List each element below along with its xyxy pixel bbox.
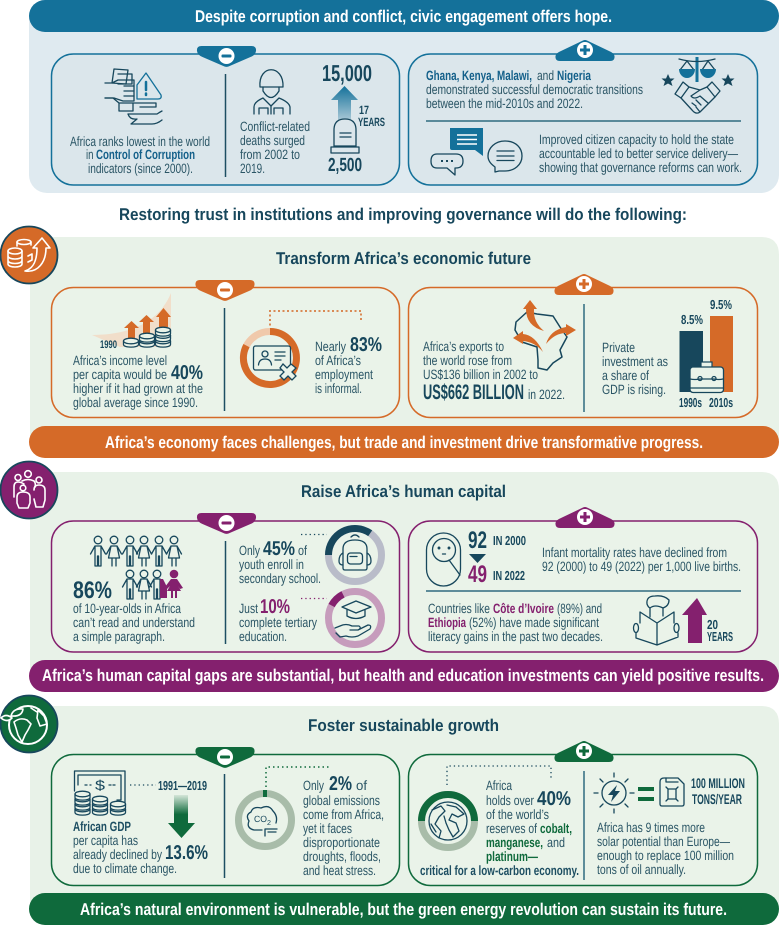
text: emissions: come from Africa,: [303, 807, 384, 822]
text: secondary school 45%: youth enroll in: [239, 557, 304, 572]
minus tab: [195, 747, 255, 768]
stat: deaths 2,500 to 15,000: 17: [359, 103, 369, 117]
stat: GDP decline arrow: 1991—2019: [158, 778, 207, 793]
text: minerals 40%: [420, 778, 579, 878]
icon: coins and rising arrow: [0, 226, 58, 284]
text: GDP decline: due to climate change.: [73, 861, 177, 876]
text: private investment: GDP is rising.: [602, 382, 666, 397]
text: conflict deaths: 2019.: [240, 161, 265, 176]
text: control of corruption: [70, 134, 210, 176]
text: exports: in 2022.: [528, 387, 565, 402]
text: tertiary education 10%: education.: [239, 629, 287, 644]
text: control of corruption: indicators (since 2000).: [88, 161, 193, 176]
icon: sun equals fuel: 100 MILLION: [691, 775, 745, 791]
title: Foster sustainable growth: [308, 716, 499, 735]
text: 83% informal: is informal.: [315, 381, 362, 396]
text: minerals 40%: holds over: [486, 793, 534, 808]
text: private investment: [602, 340, 668, 397]
text: emissions: global emissions: [303, 793, 380, 808]
minus tab: [197, 513, 256, 534]
icon: CO2 cloud: [247, 807, 277, 836]
text: GDP decline: African GDP: [73, 819, 131, 834]
text: democratic transitions: between the mid-2010s and 2022.: [426, 96, 583, 111]
section background: [30, 237, 779, 440]
text: minerals 40%: reserves of: [486, 821, 537, 836]
icon: briefcase: [690, 362, 724, 392]
plus tab: [554, 274, 614, 295]
stat: deaths 2,500 to 15,000: [322, 60, 385, 176]
text: secondary school 45%: [239, 538, 321, 586]
text: minerals 40%: manganese,: [486, 835, 543, 850]
text: conflict deaths: [240, 119, 310, 176]
text: secondary school 45%: secondary school.: [239, 571, 321, 586]
text: tertiary education 10%: complete tertiary: [239, 615, 317, 630]
icon: sun equals fuel: [594, 773, 745, 813]
text: 86% cannot read: [73, 577, 195, 644]
card: economic challenges: [52, 280, 400, 418]
text: solar potential: Africa has 9 times more: [597, 820, 705, 835]
text: emissions: disproportionate: [303, 835, 380, 850]
text: conflict deaths: from 2002 to: [240, 147, 300, 162]
text: citizen capacity: [539, 132, 742, 175]
text: solar potential: tons of oil annually.: [597, 862, 686, 877]
icon: income growth coins: 1990: [100, 339, 117, 351]
section: sustainable growth: [0, 696, 779, 925]
text: tertiary education 10%: Just: [239, 601, 258, 616]
text: tertiary education 10%: [239, 596, 317, 644]
plus tab: [555, 40, 615, 61]
stat: infant mortality 92 to 49: 49: [468, 561, 487, 588]
section background: [30, 472, 779, 675]
icon: sun equals fuel: TONS/YEAR: [692, 791, 742, 807]
icon: money exchange with warning: [105, 69, 162, 124]
card: human capital progress: [408, 507, 758, 652]
icon: money and coins: $: [95, 777, 105, 793]
icon: soldier: [254, 70, 290, 114]
text: 83% informal: [315, 334, 382, 396]
text: control of corruption: Control of Corruption: [96, 147, 195, 162]
text: infant mortality: Infant mortality rates have declined from: [542, 545, 727, 560]
stat: infant mortality 92 to 49: 92: [468, 527, 487, 554]
text: democratic transitions: Nigeria: [557, 68, 591, 83]
card: negative governance facts: [52, 46, 400, 185]
text: 83% informal: 83%: [350, 334, 382, 356]
section: human capital: [0, 462, 779, 692]
section: economic future: [0, 226, 779, 458]
text: emissions: droughts, floods,: [303, 849, 381, 864]
plus tab: [555, 507, 615, 528]
icon: reader with book: [634, 596, 679, 645]
chart: secondary school donut with backpack: [301, 528, 382, 582]
panel: civic engagement: [29, 0, 779, 193]
text: democratic transitions: and: [537, 68, 554, 83]
chart: informal employment donut: [243, 311, 361, 384]
heading: restoring trust: Restoring trust in institutions and improving governance will do the following:: [119, 205, 687, 224]
text: emissions: Only: [303, 778, 324, 793]
icon: CO2 cloud: CO: [254, 814, 267, 824]
section background: [30, 706, 779, 910]
text: literacy gains: (52%) have made significant: [469, 615, 599, 630]
text: income level 40%: per capita would be: [73, 367, 167, 382]
arrow: literacy 20 years: [682, 598, 733, 644]
chart: private investment bars: 9.5%: [710, 297, 732, 312]
text: emissions: of: [356, 778, 367, 793]
title: Transform Africa’s economic future: [276, 249, 531, 268]
text: conflict deaths: deaths surged: [240, 133, 305, 148]
text: infant mortality: [542, 545, 741, 574]
stat: infant mortality 92 to 49: [468, 527, 526, 588]
chart: private investment bars: 8.5%: [681, 312, 703, 327]
banner: human capital summary: [29, 660, 779, 692]
chart: tertiary education donut with cap: [301, 592, 382, 644]
text: exports: US$662 BILLION: [423, 381, 524, 404]
text: control of corruption: in: [86, 147, 94, 162]
text: minerals 40%: critical for a low-carbon economy.: [420, 863, 579, 878]
text: solar potential: [597, 820, 734, 877]
text: income level 40%: 40%: [171, 362, 203, 384]
text: minerals 40%: of the world’s: [486, 807, 549, 822]
text: secondary school 45%: of: [298, 543, 307, 558]
text: emissions: 2%: [329, 773, 352, 795]
text: income level 40%: Africa’s income level: [73, 353, 167, 368]
text: 86% cannot read: can’t read and understand: [73, 615, 195, 630]
text: solar potential: enough to replace 100 million: [597, 848, 734, 863]
icon: income growth coins: [92, 293, 171, 351]
icon: children pictogram 86%: [90, 536, 183, 599]
stat: GDP decline arrow: 13.6%: [165, 842, 208, 864]
text: exports: Africa’s exports to: [423, 339, 504, 354]
card: human capital challenges: [52, 513, 400, 652]
icon: earth with leaf: [0, 696, 58, 752]
text: GDP decline: per capita has: [73, 833, 138, 848]
text: tertiary education 10%: 10%: [260, 596, 290, 618]
text: control of corruption: Africa ranks lowest in the world: [70, 134, 210, 149]
text: solar potential: solar potential than Europe—: [597, 834, 730, 849]
banner: civic engagement headline: Despite corruption and conflict, civic engagement offers hope.: [195, 7, 612, 26]
banner: environment summary: [29, 893, 779, 925]
text: private investment: a share of: [602, 368, 649, 383]
text: emissions: [303, 773, 384, 878]
chart: private investment bars: 2010s: [709, 395, 733, 410]
card: positive governance facts: [408, 40, 758, 185]
text: minerals 40%: Africa: [486, 778, 512, 793]
icon: swaddled baby: [426, 533, 460, 586]
text: 83% informal: of Africa’s: [315, 353, 361, 368]
text: exports: the world rose from: [423, 353, 512, 368]
text: exports: US$136 billion in 2002 to: [423, 367, 538, 382]
panel background: [29, 0, 779, 193]
text: literacy gains: [428, 601, 603, 644]
minus tab: [195, 280, 255, 301]
text: GDP decline: already declined by: [73, 847, 162, 862]
stat: infant mortality 92 to 49: IN 2022: [493, 568, 525, 583]
card: climate challenges: [52, 747, 400, 886]
text: GDP decline: [73, 819, 177, 876]
text: secondary school 45%: 45%: [263, 538, 295, 560]
text: literacy gains: Ethiopia: [428, 615, 466, 630]
text: 83% informal: employment: [315, 367, 373, 382]
stat: GDP decline arrow: [130, 778, 208, 864]
chart: private investment bars: [679, 297, 733, 410]
text: 86% cannot read: 86%: [73, 577, 112, 604]
text: minerals 40%: and: [547, 835, 565, 850]
text: income level 40%: global average since 1990.: [73, 395, 198, 410]
stat: infant mortality 92 to 49: IN 2000: [493, 533, 526, 548]
text: exports: [423, 339, 565, 404]
arrow: literacy 20 years: YEARS: [707, 629, 733, 644]
text: democratic transitions: [426, 68, 643, 111]
text: democratic transitions: demonstrated successful democratic transitions: [426, 82, 643, 97]
title: Raise Africa’s human capital: [301, 482, 506, 501]
icon: Africa map with export arrows: [513, 300, 576, 370]
banner: civic engagement headline: [29, 0, 779, 32]
arrow: literacy 20 years: 20: [707, 617, 718, 632]
text: democratic transitions: Ghana, Kenya, Malawi,: [426, 68, 532, 83]
banner: economy summary: [29, 426, 779, 458]
text: private investment: investment as: [602, 354, 668, 369]
text: 83% informal: Nearly: [315, 339, 346, 354]
icon: speech bubbles: [431, 128, 522, 175]
icon: scales, handshake, stars: [662, 57, 734, 113]
text: secondary school 45%: Only: [239, 543, 260, 558]
minus tab: [197, 46, 256, 67]
icon: family: [0, 462, 58, 518]
stat: deaths 2,500 to 15,000: 2,500: [328, 155, 362, 176]
text: income level 40%: higher if it had grown at the: [73, 381, 203, 396]
text: literacy gains: literacy gains in the past two decades.: [428, 629, 603, 644]
text: emissions: and heat stress.: [303, 863, 376, 878]
card: trade and investment: [408, 274, 758, 418]
text: literacy gains: Côte d’Ivoire: [493, 601, 554, 616]
stat: deaths 2,500 to 15,000: 15,000: [322, 60, 372, 86]
chart: minerals donut with globe: [422, 766, 551, 848]
chart: private investment bars: 1990s: [679, 395, 702, 410]
chart: emissions donut: [238, 767, 329, 846]
text: conflict deaths: Conflict-related: [240, 119, 310, 134]
text: minerals 40%: cobalt,: [540, 821, 572, 836]
text: minerals 40%: platinum—: [486, 849, 538, 864]
text: income level 40%: [73, 353, 203, 410]
text: literacy gains: (89%) and: [557, 601, 602, 616]
icon: CO2 cloud: 2: [267, 820, 271, 827]
text: literacy gains: Countries like: [428, 601, 490, 616]
text: private investment: Private: [602, 340, 635, 355]
card: green opportunity: [408, 741, 758, 886]
plus tab: [554, 741, 614, 762]
icon: money and coins: [74, 771, 126, 815]
stat: deaths 2,500 to 15,000: YEARS: [358, 115, 385, 129]
text: emissions: yet it faces: [303, 821, 352, 836]
text: 86% cannot read: a simple paragraph.: [73, 629, 165, 644]
text: 86% cannot read: of 10-year-olds in Africa: [73, 601, 181, 616]
text: minerals 40%: 40%: [537, 788, 571, 810]
